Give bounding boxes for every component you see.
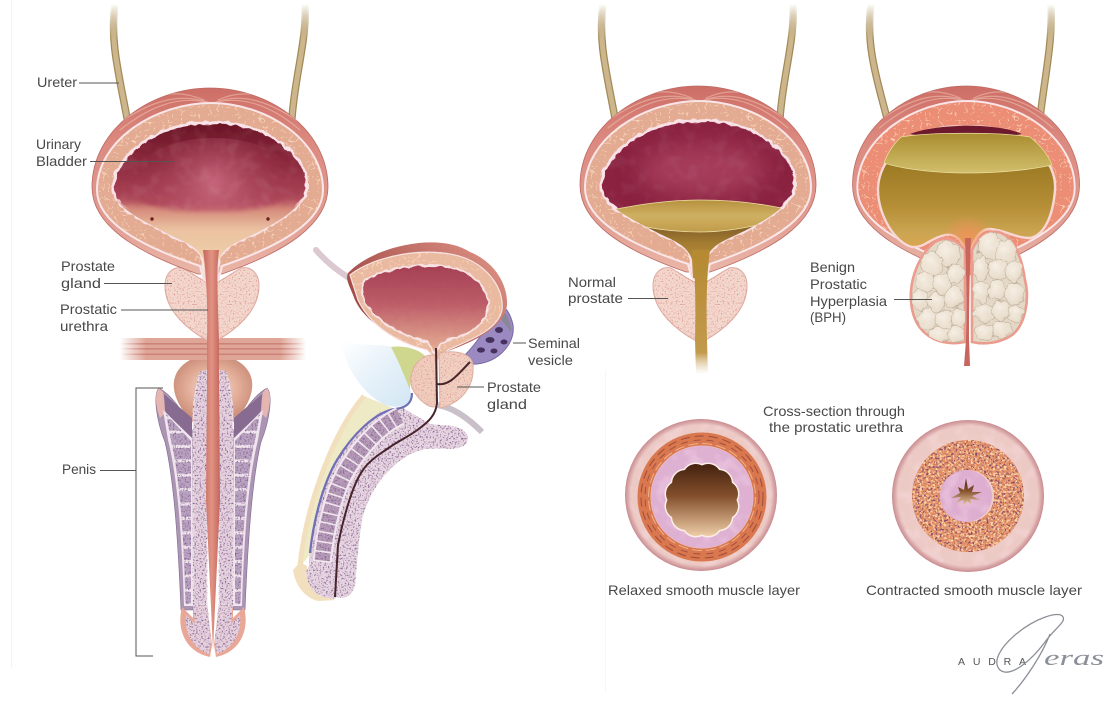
ureters <box>601 4 793 118</box>
ureters <box>869 4 1051 118</box>
label: seminal vesicle <box>513 335 580 368</box>
label: urinary bladder: Urinary <box>36 136 81 152</box>
heading: cross-section <box>763 403 905 435</box>
ligament <box>316 250 352 280</box>
label: urinary bladder: Bladder <box>36 153 87 169</box>
shaft tissue <box>306 408 468 599</box>
panel: sagittal view <box>293 242 513 601</box>
logo: Audra Geras signature: AUDRA <box>958 656 1026 668</box>
logo: Audra Geras signature <box>958 614 1104 694</box>
label: penis: Penis <box>62 461 96 477</box>
outer layer <box>892 420 1044 572</box>
panel: contracted cross-section <box>892 420 1044 572</box>
sagittal urethra <box>335 348 470 597</box>
outer layer <box>625 419 777 571</box>
label: prostate gland front <box>61 258 172 291</box>
blue fascia line <box>310 393 412 553</box>
closed star lumen <box>951 478 982 506</box>
label: prostatic urethra <box>60 301 208 334</box>
logo: Audra Geras signature: eras <box>1044 645 1104 670</box>
caption: relaxed: Relaxed smooth muscle layer <box>608 582 800 598</box>
caption: contracted: Contracted smooth muscle layer <box>866 582 1082 598</box>
label: ureter <box>37 74 119 90</box>
panel: relaxed cross-section <box>625 419 777 571</box>
heading: cross-section: the prostatic urethra <box>769 419 903 435</box>
bracket: penis <box>136 388 163 656</box>
contracted muscle ring <box>927 455 1009 537</box>
prostate gland <box>165 268 259 341</box>
label: prostate gland side <box>457 379 541 412</box>
label: BPH: Benign <box>810 259 855 275</box>
label: normal prostate <box>568 274 668 306</box>
label: BPH: Hyperplasia <box>810 293 887 309</box>
panel: normal prostate bladder <box>578 4 818 374</box>
urethral bulb <box>174 360 252 422</box>
label: prostate gland front: Prostate <box>61 258 115 274</box>
label: BPH: (BPH) <box>810 309 846 325</box>
mucosa <box>940 470 992 522</box>
label: normal prostate: prostate <box>568 290 623 306</box>
compressed urethra <box>964 238 971 366</box>
label: seminal vesicle: vesicle <box>528 352 573 368</box>
urine surface <box>616 200 782 232</box>
air space <box>910 126 1022 138</box>
panel: front view anatomy <box>90 4 330 657</box>
bladder wall <box>851 86 1081 276</box>
label: prostatic urethra: Prostatic <box>60 301 117 317</box>
seminal vesicle <box>464 305 513 364</box>
bladder lumen <box>878 126 1055 255</box>
skin and fascia <box>300 396 395 566</box>
membrane <box>438 405 482 432</box>
urethra <box>203 250 220 650</box>
label: prostate gland side: gland <box>487 396 527 412</box>
label: BPH: Prostatic <box>810 276 867 292</box>
label: urinary bladder <box>36 136 174 169</box>
pubic symphysis <box>342 342 411 407</box>
sagittal prostate <box>411 352 473 408</box>
label: prostate gland front: gland <box>61 275 101 291</box>
label: penis <box>62 461 136 477</box>
corpus cavernosum cells <box>322 416 400 562</box>
nodules <box>911 232 1025 343</box>
urine surface <box>884 133 1052 173</box>
label: BPH <box>810 259 932 325</box>
label: normal prostate: Normal <box>568 274 616 290</box>
penis section <box>156 370 270 657</box>
label: seminal vesicle: Seminal <box>528 335 580 351</box>
label: prostatic urethra: urethra <box>60 318 108 334</box>
ureters <box>113 4 305 118</box>
pelvic floor muscle band <box>120 338 306 360</box>
heading: cross-section: Cross-section through <box>763 403 905 419</box>
panel: BPH bladder <box>851 4 1081 366</box>
bladder wall <box>578 86 818 288</box>
urine pool <box>644 226 754 278</box>
orange glow <box>942 215 994 255</box>
relaxed muscle ring <box>641 436 763 558</box>
fatty tissue <box>391 347 425 390</box>
label: ureter: Ureter <box>37 74 77 90</box>
open lumen <box>665 463 739 537</box>
normal prostate gland <box>653 268 747 341</box>
golden urethra <box>692 250 710 374</box>
mucosa <box>651 446 753 548</box>
urinary bladder <box>90 88 330 290</box>
enlarged prostate <box>911 232 1027 343</box>
sagittal bladder <box>347 242 507 360</box>
label: prostate gland side: Prostate <box>487 379 541 395</box>
glans skin <box>293 562 336 601</box>
